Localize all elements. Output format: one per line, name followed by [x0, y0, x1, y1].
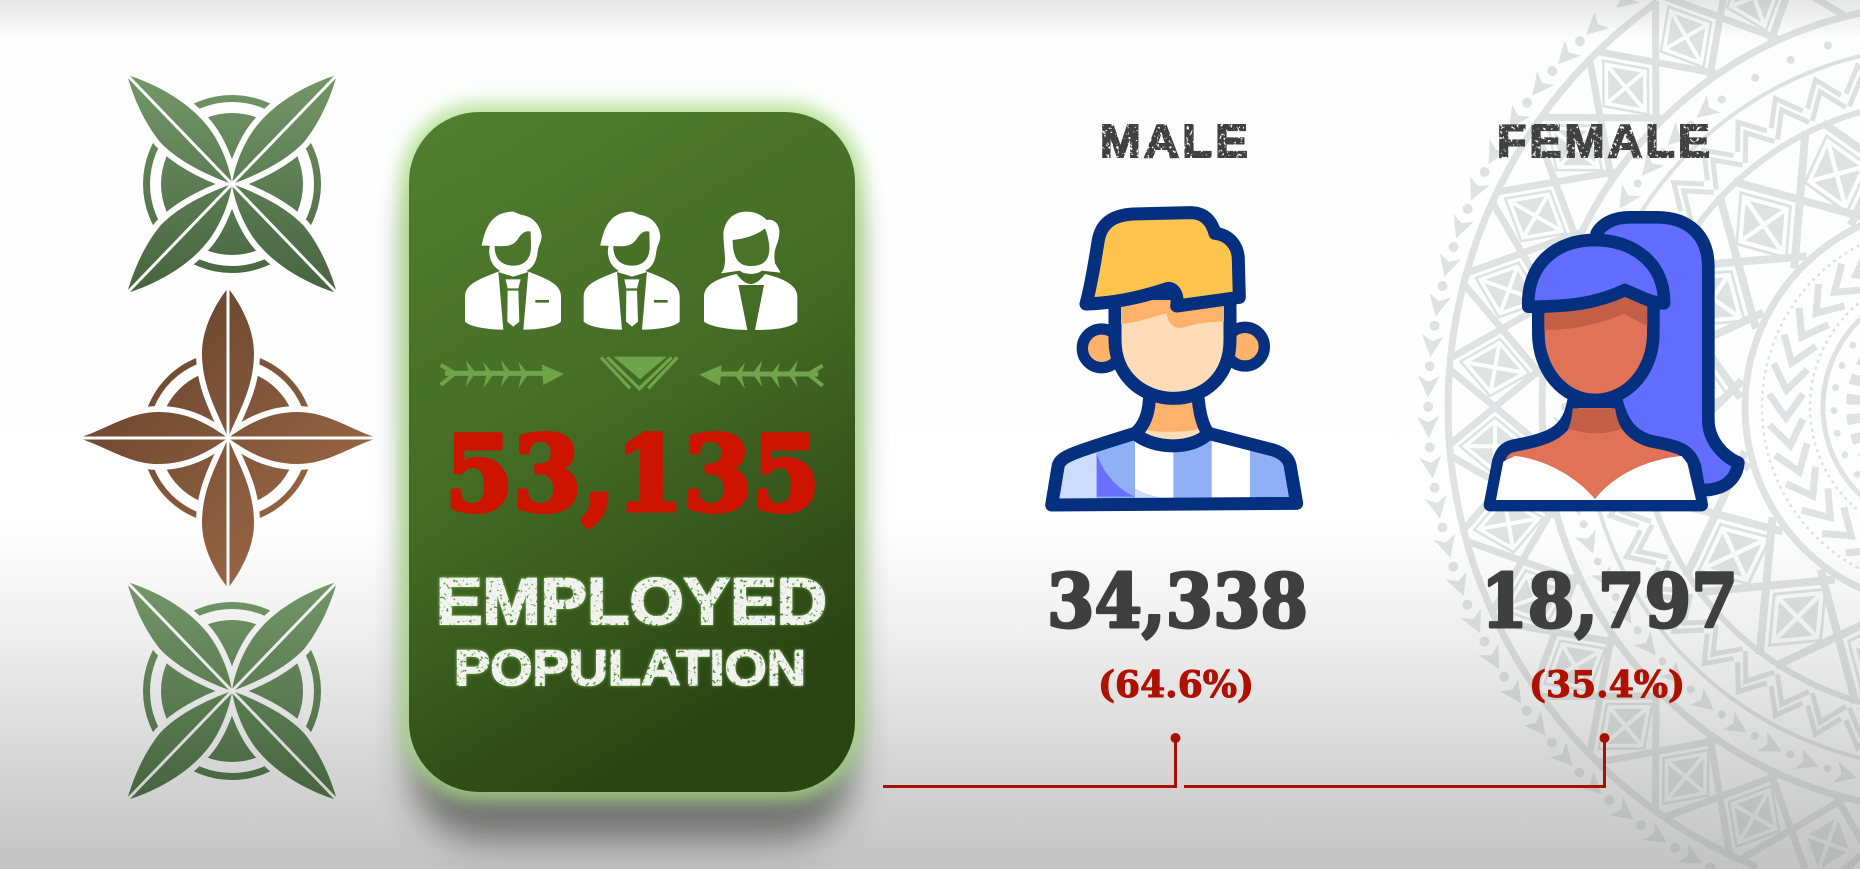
heading: female: FEMALE	[1497, 115, 1713, 167]
arrow: pointing right	[441, 360, 564, 388]
mandala background pattern	[1417, 0, 1860, 869]
connector: female	[1184, 733, 1610, 786]
emblem: bottom green leaf ornament	[128, 582, 336, 800]
heading: employed: EMPLOYED	[436, 564, 827, 638]
heading: male: MALE	[1100, 115, 1251, 167]
arrow: pointing left	[699, 361, 823, 389]
emblem: middle brown leaf ornament	[83, 290, 374, 586]
arrow: centre downward chevrons	[601, 357, 677, 389]
number: female percent: (35.4%)	[1529, 664, 1685, 706]
panel: employed population	[401, 104, 863, 840]
emblem: top green leaf ornament	[128, 76, 336, 292]
connector: male	[883, 733, 1180, 786]
icon: female avatar	[1490, 217, 1738, 505]
number: male percent: (64.6%)	[1098, 664, 1254, 706]
icon: three employees	[465, 212, 797, 330]
icon: male avatar	[1050, 213, 1298, 507]
number: female count: 18,797	[1481, 559, 1738, 645]
heading: population: POPULATION	[454, 640, 806, 696]
number: male count: 34,338	[1047, 559, 1308, 645]
total number: 53,135	[445, 414, 820, 535]
